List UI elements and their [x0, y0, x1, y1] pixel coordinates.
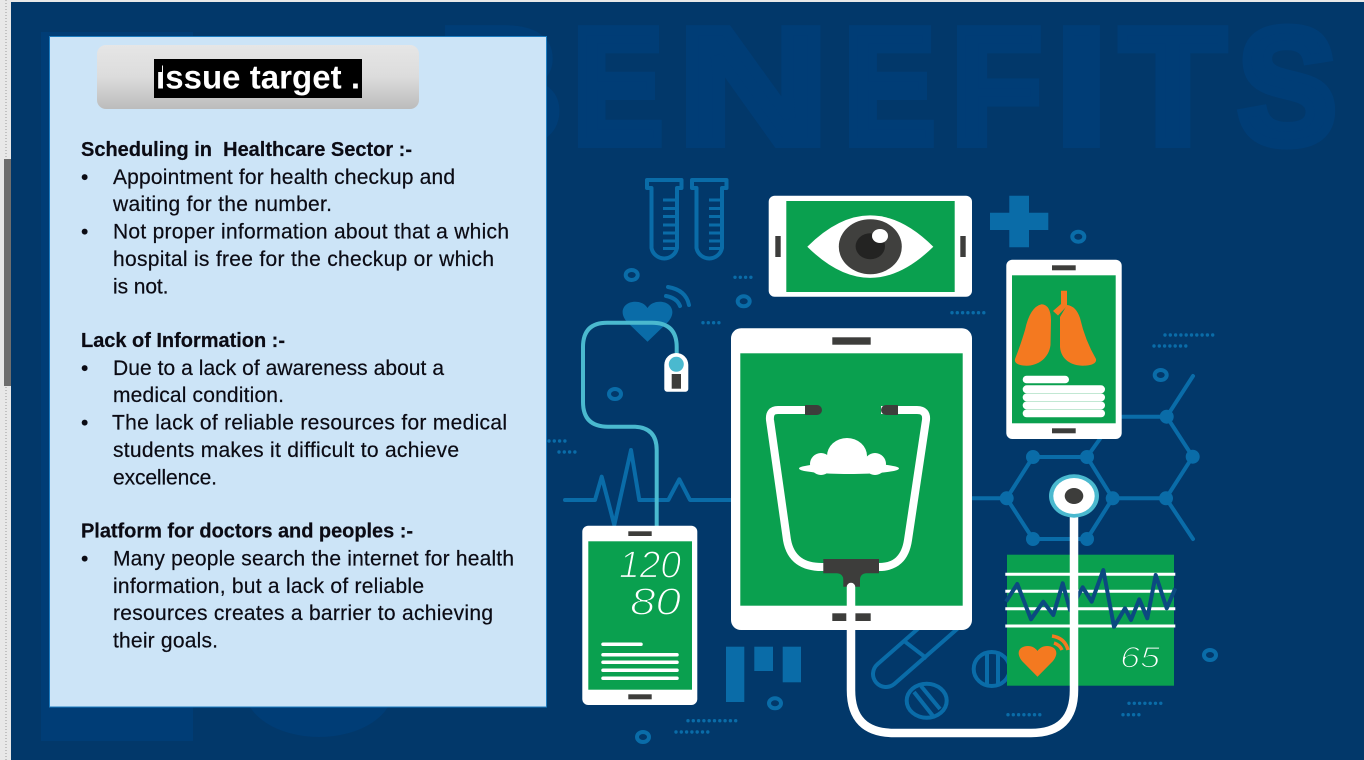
- reading 120: 120: [619, 544, 681, 586]
- section: scheduling in healthcare sector: waiting for the number.: [112, 193, 332, 216]
- section: lack of information: excellence.: [113, 466, 217, 489]
- panel: heart rate monitor: [1005, 555, 1175, 686]
- background watermark word: B: [439, 0, 562, 178]
- section: lack of information: medical condition.: [113, 384, 284, 407]
- device: phone with lungs: [1006, 260, 1122, 439]
- section: scheduling in healthcare sector: •: [81, 166, 88, 189]
- section: scheduling in healthcare sector: •: [81, 220, 88, 244]
- ecg trace: [1006, 570, 1175, 627]
- background watermark word: N: [678, 0, 828, 178]
- section: scheduling in healthcare sector: [81, 139, 509, 298]
- panel: issue target: [50, 36, 546, 707]
- section: scheduling in healthcare sector: hospital is free for the checkup or which: [113, 248, 494, 271]
- background watermark word: [439, 0, 1336, 179]
- section: lack of information: •: [81, 412, 88, 434]
- section: scheduling in healthcare sector: Scheduling in Healthcare Sector :-: [81, 139, 412, 161]
- reading 80: 80: [630, 581, 681, 623]
- icon: lungs: [1015, 291, 1096, 366]
- heading button: [97, 45, 419, 109]
- icon: round pill vertical: [974, 652, 1010, 686]
- text rows: [1023, 376, 1105, 417]
- section: platform for doctors and peoples: Many people search the internet for health: [113, 548, 514, 571]
- stethoscope arms: [770, 405, 926, 587]
- ecg line left: [565, 450, 732, 525]
- icon: cloud: [799, 438, 899, 475]
- section: platform for doctors and peoples: •: [81, 548, 88, 571]
- section: lack of information: students makes it difficult to achieve: [113, 439, 459, 462]
- background watermark word: F: [952, 0, 1042, 179]
- hexagon network: [972, 376, 1200, 546]
- icon: eye: [807, 215, 933, 278]
- icon: test tubes: [647, 180, 726, 258]
- section: platform for doctors and peoples: information, but a lack of reliable: [113, 575, 424, 598]
- reading 65: 65: [1120, 641, 1160, 674]
- section: lack of information: Due to a lack of awareness about a: [113, 357, 444, 380]
- section: platform for doctors and peoples: resources creates a barrier to achieving: [113, 602, 493, 625]
- stethoscope head: [1049, 474, 1099, 518]
- background watermark word: S: [1238, 0, 1336, 179]
- icon: medical plus: [990, 196, 1048, 247]
- section: lack of information: •: [81, 357, 88, 380]
- faint watermark shapes behind panel: [41, 32, 393, 741]
- icon: orange heart with signal: [1019, 636, 1068, 677]
- section: lack of information: [81, 330, 507, 489]
- icon: bars: [726, 647, 801, 702]
- device: phone with eye: [769, 196, 972, 297]
- teal cable and finger clip: [583, 323, 688, 527]
- section: scheduling in healthcare sector: Not proper information about that a which: [113, 220, 509, 244]
- section: lack of information: The lack of reliable resources for medical: [112, 412, 507, 434]
- section: platform for doctors and peoples: their goals.: [113, 630, 218, 653]
- background watermark word: T: [1121, 0, 1225, 178]
- stethoscope tube: [851, 517, 1074, 733]
- section: lack of information: Lack of Information :-: [81, 330, 285, 352]
- icon: capsule: [886, 618, 950, 674]
- heading button: Issue target .: [156, 59, 360, 96]
- text lines: [603, 644, 677, 678]
- decorative dotted rows and rings: [549, 232, 1216, 742]
- device: blood pressure phone: [582, 526, 697, 705]
- device: main tablet: [731, 328, 972, 630]
- background watermark word: I: [1056, 0, 1107, 178]
- section: scheduling in healthcare sector: is not.: [113, 275, 168, 298]
- section: platform for doctors and peoples: [81, 521, 514, 653]
- section: platform for doctors and peoples: Platform for doctors and peoples :-: [81, 521, 413, 543]
- icon: blue heart with signal: [623, 287, 689, 342]
- icon: round pill diagonal: [907, 684, 947, 718]
- section: scheduling in healthcare sector: Appointment for health checkup and: [113, 166, 455, 189]
